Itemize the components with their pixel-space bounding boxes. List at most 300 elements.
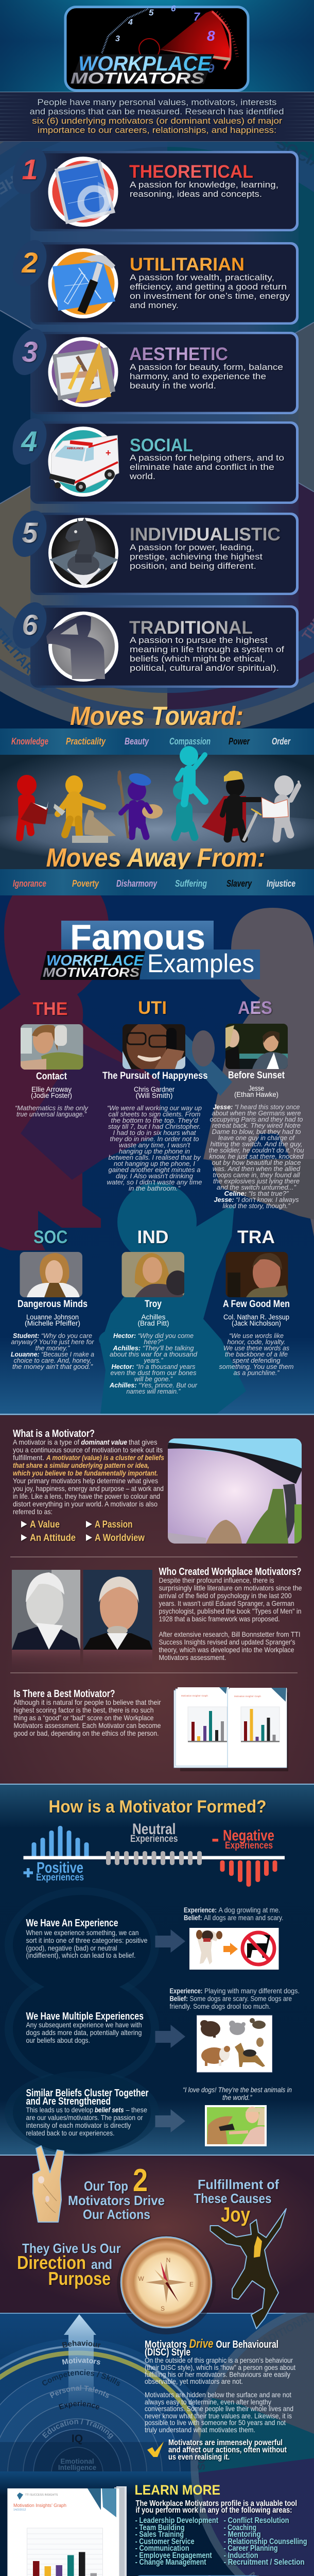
list: motivator synonyms: An Attitude: [30, 1533, 76, 1544]
description: beliefs (which might be ethical,: [130, 654, 265, 664]
text block: motivators drive behaviour: (DISC) Style: [145, 2347, 190, 2358]
panel: moves toward band: Order: [272, 736, 291, 747]
movie title: The Pursuit of Happyness: [102, 1071, 208, 1081]
layer labels: Experience: [59, 2401, 99, 2410]
panel: moves toward band: Power: [229, 736, 250, 747]
text: direction and purpose: They Give Us Our: [22, 2241, 120, 2256]
photo: troy: [121, 1252, 189, 1297]
text: learn more intro: [136, 2499, 297, 2515]
text block: we have an experience: [26, 1918, 148, 1959]
heading: famous examples: Examples: [147, 949, 254, 978]
arrow 1: [155, 1929, 185, 1953]
caption: experience and belief 1: Belief:: [184, 1913, 202, 1922]
text block: similar beliefs cluster: and Are Strengthened: [26, 2096, 111, 2107]
text block: similar beliefs cluster: belief sets: [95, 2106, 124, 2114]
icon: compass: [117, 2235, 216, 2334]
icon: ambulance: [48, 427, 119, 497]
quote: between calls. I realised that by: [108, 1154, 201, 1161]
chart: experience bars: Experiences: [36, 1872, 84, 1883]
photo: eduard spranger: [12, 1570, 80, 1650]
character: [31, 1086, 72, 1099]
text block: who created: Motivators assessment.: [159, 1653, 226, 1662]
panel: moves away band: Ignorance: [13, 878, 46, 889]
icon: compass: W: [138, 2275, 144, 2282]
description: A passion to pursue the highest: [130, 635, 268, 645]
text block: motivators drive behaviour: Our Behavioural: [216, 2339, 278, 2350]
description: harmony, and to experience the: [130, 371, 266, 381]
icon: compass: E: [189, 2281, 194, 2288]
quote: the explosives just lying there: [213, 1177, 300, 1185]
text block: best motivator: good or bad, depending on the ethics of the person.: [13, 1729, 159, 1737]
text block: what is a motivator: A motivator (value) is a cluster of beliefs: [46, 1453, 164, 1462]
text: our top 2 motivators: [68, 2163, 165, 2222]
illustration: report stack: [7, 2486, 127, 2576]
text block: we have an experience: When we experience something, we can: [26, 1928, 139, 1937]
panel: motivator explanations: [0, 1415, 314, 1784]
text block: similar beliefs cluster: intensity of each motivator is directly: [26, 2121, 131, 2129]
list: application areas left: - Customer Service: [135, 2537, 195, 2546]
text block: who created: years. It wasn't until Eduard Spranger, a German: [159, 1599, 294, 1607]
layer labels: Intelligence: [58, 2464, 97, 2471]
callout: motivators powerful: us even realising it.: [168, 2453, 230, 2462]
quote: Louanne: “Because I make a: [11, 1350, 94, 1358]
list: application areas right: [224, 2516, 307, 2567]
text: fulfillment causes joy: Fulfillment of: [198, 2177, 279, 2192]
character: [223, 1313, 289, 1327]
illustration: report stack: Motivation Insights’ Graph: [13, 2503, 66, 2509]
text block: motivators drive behaviour: observable, yet motivators are not.: [145, 2377, 243, 2385]
description: beauty in the world.: [130, 381, 216, 391]
text block: similar beliefs cluster: Similar Beliefs Cluster Together: [26, 2088, 149, 2099]
figure: teal pair climbing: [173, 746, 205, 837]
text block: we have an experience: sort it into one of three categories: positive: [26, 1936, 148, 1944]
intro text: six (6) underlying motivators (or dominant values) of major: [32, 116, 283, 126]
list: application areas left: - Sales Training: [135, 2530, 184, 2539]
example: soc, dangerous minds: [11, 1227, 94, 1370]
callout: motivators powerful: Motivators are immensely powerful: [168, 2438, 283, 2447]
figure: purple artist: [117, 770, 163, 838]
chart: experience bars: Positive: [37, 1859, 83, 1876]
character: Louanne Johnson: [26, 1313, 79, 1321]
text block: what is a motivator: that gives: [129, 1438, 158, 1446]
photo: a few good men: [225, 1252, 288, 1297]
text: direction and purpose: Direction: [17, 2252, 86, 2273]
character: [134, 1086, 175, 1099]
icon: compass: N: [166, 2257, 170, 2264]
panel: moves toward band: Beauty: [125, 736, 149, 747]
character: [234, 1084, 278, 1098]
icon: jumping man: [210, 2209, 286, 2329]
quote: true universal language.”: [16, 1110, 87, 1118]
example: ind, troy: [109, 1227, 198, 1395]
heading: what is a motivator: What is a Motivator?: [13, 1428, 95, 1439]
text block: who created: Success Insights revised and updated Spranger's: [159, 1638, 295, 1646]
text block: motivators drive behaviour: possible to live with someone for 50 years and not: [145, 2418, 286, 2427]
character: Ellie Arroway: [31, 1086, 72, 1093]
example: uti, pursuit of happyness: [102, 998, 208, 1192]
icon: chess knight: [48, 517, 118, 588]
list: application areas right: - Career Planning: [224, 2544, 278, 2553]
quote: i love dogs: the world.”: [222, 2093, 253, 2102]
list: application areas left: - Team Building: [135, 2523, 185, 2532]
number badge 3: 3: [22, 335, 38, 368]
text: our top 2 motivators: Our Top: [84, 2178, 128, 2194]
quote: spent defending: [233, 1357, 281, 1364]
description: world.: [129, 471, 155, 481]
logo: Workplace Motivators gauge: 4: [128, 18, 133, 27]
layer labels: Personal Talents: [49, 2385, 109, 2398]
heading: moves away from: Moves Away From:: [46, 843, 266, 872]
icon: blueprint and protractor: [48, 157, 118, 227]
quote: Jesse: “I heard this story once: [213, 1103, 300, 1111]
heading: learn more: LEARN MORE: [135, 2482, 220, 2498]
title: AESTHETIC: [129, 344, 228, 364]
photo: dangerous minds: [20, 1252, 82, 1297]
description: reasoning, ideas and concepts.: [130, 189, 262, 199]
arrow: up: [64, 2314, 96, 2404]
text block: similar beliefs cluster: [26, 2088, 149, 2137]
text block: best motivator: Although it is natural for people to believe that their: [13, 1698, 161, 1706]
layer labels: Behaviour: [62, 2340, 101, 2348]
quote: Achilles: “Yes, prince. But our: [109, 1381, 198, 1389]
intro strip: [0, 92, 314, 142]
quote: hanging up the phone in: [119, 1147, 190, 1155]
background wheel, lower right: TRADITIONAL: [248, 2311, 314, 2354]
quote: Achilles: “They'll be talking: [113, 1344, 194, 1352]
list: application areas left: - Communication: [135, 2544, 189, 2553]
text: our top 2 motivators: Motivators Drive: [68, 2193, 165, 2208]
panel: card 1 theoretical: [6, 143, 299, 231]
heading: famous examples: [40, 917, 260, 980]
quote: they do in nine. In order not to: [110, 1135, 199, 1143]
text block: what is a motivator: in life. Like a lens, they have the power to colour and: [13, 1492, 160, 1500]
quote: [107, 1104, 202, 1192]
callout: motivators powerful: and affect our actions, often without: [168, 2446, 287, 2454]
text block: what is a motivator: you a continuous source of motivation to seek out its: [13, 1446, 163, 1454]
photo: pursuit of happyness: [123, 1021, 185, 1071]
panel: moves away band: Injustice: [267, 878, 295, 889]
list: motivator synonyms: A Worldview: [95, 1533, 145, 1544]
description: efficiency, and getting a good return: [130, 282, 287, 292]
quote: even the dust from our bones: [110, 1369, 197, 1377]
title: SOCIAL: [130, 435, 193, 455]
text block: what is a motivator: [13, 1438, 164, 1516]
description: A passion for helping others, and to: [130, 453, 284, 463]
caption: experience and belief 1: All dogs are mean and scary.: [204, 1913, 283, 1922]
text: direction and purpose: and: [91, 2257, 112, 2272]
panel: card 5 individualistic: [6, 505, 299, 595]
text block: motivators drive behaviour: Motivators are hidden below the surface and are not: [145, 2391, 291, 2399]
text block: we have an experience: (indifferent), which can lead to a belief.: [26, 1951, 136, 1959]
heading: famous examples: WORKPLACE: [46, 953, 145, 969]
quote: as a punchline.”: [234, 1369, 280, 1377]
heading: famous examples: Famous: [70, 917, 205, 957]
title: TRADITIONAL: [129, 618, 253, 638]
panel: moves away band: Poverty: [72, 878, 99, 889]
number badge 2: 2: [21, 246, 38, 279]
chart: experience bars: [24, 1821, 285, 1887]
quote: anyway? You're just here for: [11, 1338, 94, 1346]
text block: similar beliefs cluster: related back to our experiences.: [26, 2129, 114, 2137]
description: political, cultural and/or spiritual).: [130, 663, 279, 673]
text block: motivators drive behaviour: (their DISC style), which is “how” a person goes about: [145, 2363, 295, 2371]
caption: experience and belief 2: Experience:: [170, 1987, 203, 1995]
text: direction and purpose: Purpose: [48, 2268, 111, 2289]
description: position, and being different.: [130, 561, 256, 571]
logo: Workplace Motivators gauge: 7: [194, 10, 201, 23]
figure: black king: [202, 771, 261, 841]
number badge 4: 4: [21, 425, 38, 457]
example: tra, a few good men: [219, 1227, 294, 1377]
text block: we have multiple experiences: Any subsequent experience we have with: [26, 2021, 142, 2029]
intro text: [30, 97, 284, 135]
text block: motivators drive behaviour: conversations. Some people live their whole lives and: [145, 2404, 293, 2413]
icon: peace hand: [33, 2146, 64, 2222]
quote: Student: “Why do you care: [13, 1332, 92, 1340]
description: A passion for beauty, form, balance: [130, 362, 283, 372]
intro text: importance to our careers, relationships, and happiness:: [38, 125, 276, 135]
description: A passion for wealth, practicality,: [130, 273, 274, 282]
text: fulfillment causes joy: [194, 2177, 279, 2226]
text block: we have multiple experiences: [26, 2011, 144, 2044]
character: (Michelle Pfeiffer): [25, 1319, 80, 1327]
character: (Jodie Foster): [31, 1092, 72, 1099]
logo: Workplace Motivators gauge: MOTIVATORS: [71, 69, 204, 87]
text: fulfillment causes joy: Joy: [221, 2204, 251, 2226]
quote: the backbone of a life: [225, 1350, 288, 1358]
quote: Jesse: “I don't know. I always: [214, 1196, 299, 1204]
band behind motivator cards: [30, 155, 299, 685]
background ovals: [5, 1887, 159, 2155]
quote: was. And then when the allied: [213, 1165, 301, 1173]
text block: similar beliefs cluster: are our values/motivators. The passion or: [26, 2113, 143, 2122]
example: the, contact: THE: [33, 999, 68, 1019]
logo: Workplace Motivators gauge: 9: [207, 62, 215, 76]
chart: experience bars: Neutral: [132, 1821, 176, 1838]
description: [130, 362, 283, 391]
image: growling dog to no-dogs sign: [189, 1928, 279, 1970]
logo: Workplace Motivators gauge: 6: [171, 4, 176, 13]
character: (Jack Nicholson): [232, 1319, 281, 1327]
number badge 1: 1: [22, 153, 38, 185]
panel: card 6 traditional: [6, 597, 299, 688]
number badge 2: [6, 235, 53, 292]
panel: moves toward band: Knowledge: [11, 736, 48, 747]
text block: motivators drive behaviour: never know what their true values are. Likewise, it is: [145, 2412, 292, 2420]
logo: Workplace Motivators gauge: WORKPLACE: [78, 53, 212, 75]
text block: who created: After extensive research, Bill Bonnstetter from TTI: [159, 1630, 301, 1638]
text block: we have multiple experiences: We Have Multiple Experiences: [26, 2011, 144, 2022]
quote: hitting the switch. And the guy,: [210, 1140, 303, 1148]
text block: what is a motivator: which you believe to be fundamentally important.: [13, 1469, 158, 1477]
quote: choice to care. And, honey,: [13, 1357, 92, 1364]
icon: compass: S: [161, 2305, 165, 2312]
chart: experience bars: Experiences: [225, 1840, 273, 1851]
text block: motivators drive behaviour: On the outside of this graphic is a person’s behaviour: [145, 2356, 293, 2364]
quote: “We use words like: [229, 1332, 284, 1340]
panel: learn more: [7, 2482, 314, 2576]
text block: motivators drive behaviour: fulfilling his or her motivators. Behaviours are easily: [145, 2370, 290, 2378]
text block: who created: [159, 1576, 302, 1662]
description: and money.: [130, 300, 179, 310]
panel: card 4 social: [6, 413, 299, 504]
list: application areas left: - Change Management: [135, 2558, 206, 2567]
panel: moves toward band: Compassion: [169, 736, 211, 747]
background wheel, lower right: [0, 2298, 314, 2576]
quote: stay till 7, but I had Christopher.: [108, 1123, 201, 1130]
panel: drive and purpose: [0, 2155, 314, 2313]
list: application areas left: [135, 2516, 218, 2567]
layer labels: [42, 2340, 120, 2471]
caption: experience and belief 2: Belief:: [170, 1994, 188, 2003]
text block: we have an experience: We Have An Experience: [26, 1918, 118, 1929]
text block: motivators drive behaviour: always easy to determine, even after lengthy: [145, 2398, 271, 2406]
description: A passion for knowledge, learning,: [130, 180, 278, 190]
character: (Will Smith): [136, 1092, 173, 1099]
number badge 1: [6, 143, 53, 199]
text block: we have an experience: (good), negative (bad) or neutral: [26, 1944, 117, 1952]
quote: know, he just sat there, knocked: [209, 1153, 304, 1160]
text block: what is a motivator: Your primary motivators help determine what gives: [13, 1477, 158, 1485]
example: uti, pursuit of happyness: UTI: [138, 998, 167, 1018]
panel: card 3 aesthetic: [6, 324, 299, 414]
section background: famous examples: [0, 871, 314, 1415]
quote: waste any time, I wasn't: [119, 1141, 190, 1149]
intro text: and passions that can be measured. Research has identified: [30, 107, 284, 116]
example: the, contact: [15, 999, 89, 1118]
callout: motivators powerful: [168, 2438, 287, 2462]
quote: retreat back. They wired Notre: [212, 1122, 301, 1129]
icon: check mark: [147, 2442, 164, 2457]
text block: what is a motivator: referred to as:: [13, 1507, 53, 1516]
description: [130, 273, 290, 310]
quote: [11, 1332, 94, 1370]
intro text: People have many personal values, motivators, interests: [37, 97, 276, 107]
quote: the soldier, he couldn't do it. You: [209, 1146, 304, 1154]
character: (Brad Pitt): [138, 1319, 169, 1327]
logo: Workplace Motivators gauge: [65, 4, 248, 91]
description: [130, 543, 263, 571]
quote: and the switch unturned...”: [217, 1183, 296, 1191]
caption: experience and belief 2: friendly. Some dogs drool too much.: [170, 2002, 271, 2010]
list: application areas right: - Conflict Resolution: [224, 2516, 289, 2525]
character: [25, 1313, 80, 1327]
text block: who created: theory, which was developed into the Workplace: [159, 1646, 294, 1654]
logo: Workplace Motivators gauge: 8: [207, 28, 215, 44]
quote: leave one guy in charge of: [218, 1134, 295, 1142]
example: aes, before sunset: AES: [238, 998, 272, 1018]
pyramid of behaviour: [42, 2314, 120, 2471]
quote: something. You use them: [219, 1363, 294, 1370]
panel: moves toward band: Practicality: [66, 736, 106, 747]
example: soc, dangerous minds: SOC: [33, 1227, 68, 1247]
number badge 6: 6: [22, 608, 38, 641]
quote: in the bathroom.”: [129, 1184, 181, 1192]
chart: experience bars: Negative: [223, 1827, 274, 1844]
illustration: report stack: 14/2/2012: [13, 2509, 26, 2512]
quote: about when the Germans were: [212, 1109, 301, 1117]
number badge 5: 5: [22, 516, 38, 549]
layer labels: IQ: [72, 2433, 83, 2445]
text block: who created: surprisingly little literature on motivators since the: [159, 1584, 302, 1592]
text block: what is a motivator: dominant value: [81, 1438, 127, 1446]
text: our top 2 motivators: Our Actions: [83, 2207, 150, 2222]
text block: what is a motivator: that share a similar underlying pattern or idea,: [13, 1461, 149, 1469]
photo reflection: [12, 1650, 152, 1671]
text: direction and purpose: [17, 2241, 120, 2289]
heading: How is a Motivator Formed?: [48, 1797, 267, 1817]
character: Jesse: [249, 1084, 264, 1092]
chart: report pages: [174, 1687, 288, 1771]
example: ind, troy: IND: [137, 1227, 169, 1247]
number badge 6: [6, 597, 53, 654]
layer labels: Competencies / Skills: [42, 2369, 120, 2386]
panel: moves away band: Disharmony: [116, 878, 158, 889]
layer labels: Emotional: [60, 2458, 94, 2465]
panel: stage with motivator figures: [0, 746, 314, 869]
description: [130, 180, 278, 199]
arrow 2: [155, 2025, 185, 2048]
character: Chris Gardner: [134, 1086, 175, 1093]
quote: liked the story, though.”: [222, 1202, 290, 1210]
list: motivator synonyms: A Value: [30, 1519, 60, 1530]
text block: motivators drive behaviour: [145, 2337, 295, 2434]
quote: occupying Paris and they had to: [210, 1115, 303, 1123]
quote: years.”: [144, 1357, 163, 1364]
example: tra, a few good men: TRA: [237, 1227, 275, 1247]
description: prestige, achieving the highest: [130, 552, 263, 562]
quote: “We were all working our way up: [107, 1104, 202, 1112]
movie title: Before Sunset: [228, 1070, 285, 1081]
text block: what is a motivator: fulfillment.: [13, 1453, 44, 1462]
title: UTILITARIAN: [130, 255, 245, 275]
character: (Ethan Hawke): [234, 1091, 278, 1098]
quote: [219, 1332, 294, 1377]
quote: i love dogs: [183, 2086, 292, 2102]
text block: similar beliefs cluster: This leads us to develop: [26, 2106, 93, 2114]
character: Achilles: [141, 1313, 166, 1321]
heading: moves toward: Moves Toward:: [70, 701, 243, 731]
icon: ambulance: AMBULANCE: [67, 447, 84, 450]
quote: We use these words as: [223, 1344, 289, 1352]
quote: Dame to blow, but they had to: [212, 1128, 301, 1136]
logo: Workplace Motivators gauge: 3: [115, 35, 120, 43]
figure: white with book: [261, 775, 300, 839]
text block: we have multiple experiences: dogs adds more data, potentially altering: [26, 2028, 142, 2037]
panel: behaviour iceberg background: [0, 2313, 308, 2471]
photo: woman with dog: [205, 2105, 267, 2146]
quote: water, so I didn't waste any time: [107, 1178, 202, 1186]
text block: what is a motivator: A motivator is a type of: [13, 1438, 79, 1446]
panel: card 2 utilitarian: [6, 235, 299, 325]
text block: motivators drive behaviour: Motivators: [145, 2339, 187, 2350]
number badge 4: [6, 413, 53, 470]
list: application areas right: - Coaching: [224, 2523, 256, 2532]
chart: experience bars: Experiences: [130, 1834, 178, 1844]
panel: moves away band: [0, 869, 314, 895]
panel: moves away band: Slavery: [226, 878, 252, 889]
heading: is there a best motivator: Is There a Best Motivator?: [13, 1688, 115, 1700]
description: A passion for power, leading,: [130, 543, 254, 552]
text block: motivators drive behaviour: truly understand what motivates them.: [145, 2426, 255, 2434]
illustration: report stack: TTI SUCCESS INSIGHTS: [25, 2494, 58, 2497]
quote: the money.”: [35, 1344, 70, 1352]
character: [138, 1313, 169, 1327]
text block: what is a motivator: you joy, happiness, energy and purpose – at work and: [13, 1484, 164, 1493]
movie title: Troy: [145, 1299, 162, 1310]
icon: saluting soldier: [46, 612, 118, 682]
caption: experience and belief 2: [170, 1987, 300, 2010]
